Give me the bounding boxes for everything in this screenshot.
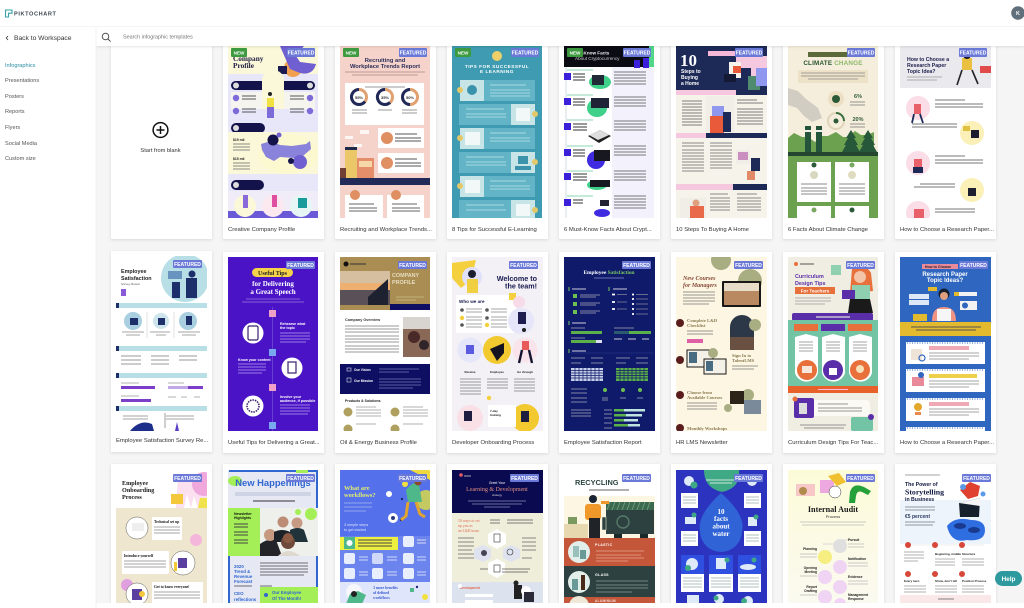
icon: search (102, 33, 111, 42)
thumbnail: Company Overview (345, 318, 380, 322)
featured badge (287, 48, 315, 57)
thumbnail: Pursuit (848, 538, 860, 542)
thumbnail: RECYCLING (575, 478, 619, 487)
card: Recruiting and Workplace Trends (335, 40, 436, 239)
thumbnail: Our Employee (272, 590, 302, 595)
thumbnail: Welcome to (497, 274, 538, 283)
thumbnail: training (490, 413, 501, 417)
thumbnail: Topic Idea? (907, 69, 935, 75)
card: Learning & Development (447, 464, 548, 608)
navigation list: Infographics (5, 63, 36, 69)
featured badge: FEATURED (511, 476, 538, 482)
featured badge: FEATURED (735, 476, 762, 482)
logo: PIKTOCHART (14, 12, 57, 18)
caption: HR LMS Newsletter (676, 440, 728, 446)
featured badge: FEATURED (847, 476, 874, 482)
thumbnail: Our Mission (354, 379, 373, 383)
caption: Creative Company Profile (228, 227, 296, 233)
thumbnail (116, 256, 207, 431)
navigation list: Flyers (5, 125, 20, 131)
thumbnail: Onboarding (122, 487, 155, 494)
caption: Developer Onboarding Process (452, 440, 534, 446)
featured badge: FEATURED (174, 476, 201, 482)
thumbnail: 55% (355, 95, 363, 100)
label: start from blank: Start from blank (140, 148, 181, 154)
thumbnail: Development (460, 586, 481, 590)
thumbnail: Go through (517, 370, 533, 374)
thumbnail: Steps to (681, 69, 701, 75)
thumbnail: of defined (373, 591, 390, 595)
thumbnail: 10 (718, 508, 725, 516)
thumbnail: Show, don't tell (935, 579, 957, 583)
navigation list: Posters (5, 94, 24, 100)
thumbnail: Greet Your (489, 481, 506, 485)
thumbnail (340, 46, 430, 218)
card: Internal Audit Process (783, 464, 884, 608)
thumbnail: Useful Tips (258, 271, 288, 277)
featured badge (959, 48, 987, 57)
thumbnail: Learning & Development (466, 487, 528, 493)
thumbnail: Highlights (234, 516, 251, 520)
thumbnail: New Happenings (235, 477, 311, 488)
thumbnail (676, 46, 767, 218)
thumbnail: -Know Facts (582, 50, 610, 56)
thumbnail: Survey Result (121, 282, 140, 286)
thumbnail (676, 257, 767, 431)
thumbnail: $15 mil (233, 157, 245, 161)
card: Employee Onboarding Process (111, 464, 216, 608)
thumbnail: 3 simple steps (344, 523, 368, 527)
thumbnail: Available Courses (687, 395, 722, 400)
new badge: NEW (458, 50, 469, 56)
featured badge (622, 261, 651, 269)
thumbnail: the team! (505, 282, 537, 290)
thumbnail: audience, if possible (280, 399, 315, 403)
thumbnail: Structure (962, 552, 976, 556)
featured badge (511, 48, 539, 57)
thumbnail: workflows? (344, 492, 376, 499)
thumbnail: Who we are (459, 299, 485, 304)
new badge (455, 48, 471, 57)
thumbnail: 7-day (490, 409, 498, 413)
navigation list: Social Media (5, 141, 38, 147)
featured badge: FEATURED (624, 50, 651, 56)
thumbnail: to get started (344, 528, 366, 532)
thumbnail: Planning (803, 547, 817, 551)
caption: 8 Tips for Successful E-Learning (452, 227, 537, 233)
card: 6 Must-Know Facts About Crypto (559, 40, 660, 239)
thumbnail (340, 257, 430, 431)
thumbnail: Employee (121, 269, 146, 275)
thumbnail: Evidence (848, 575, 863, 579)
thumbnail: Profile (233, 61, 255, 70)
featured badge: FEATURED (512, 50, 539, 56)
thumbnail: 6% (854, 94, 862, 100)
thumbnail: water (712, 530, 730, 538)
caption: Employee Satisfaction Survey Re... (116, 438, 209, 444)
thumbnail (900, 474, 991, 603)
featured badge (398, 261, 427, 269)
featured badge (846, 261, 875, 269)
thumbnail: New Courses (682, 276, 716, 282)
thumbnail: How to Choose a (907, 57, 949, 63)
thumbnail: Curriculum (795, 274, 824, 280)
featured badge: FEATURED (287, 476, 314, 482)
navigation list: Presentations (5, 78, 39, 84)
featured badge (847, 48, 875, 57)
card: Developer Onboarding Process (447, 252, 548, 453)
thumbnail: Technical set up (154, 520, 179, 524)
thumbnail: Employee Satisfaction (583, 270, 635, 276)
thumbnail (564, 257, 655, 431)
featured badge: FEATURED (963, 476, 990, 482)
navigation list: Custom size (5, 156, 36, 162)
card: Employee Satisfaction Report (559, 252, 660, 453)
back link: Back to Workspace (14, 35, 72, 42)
caption: Useful Tips for Delivering a Great... (228, 440, 320, 446)
thumbnail: 20% (852, 117, 864, 123)
featured badge: FEATURED (960, 50, 987, 56)
avatar (1011, 6, 1024, 20)
card: HR LMS Newsletter (671, 250, 772, 453)
thumbnail: Research Paper (922, 272, 968, 278)
thumbnail: the topic (280, 326, 295, 330)
thumbnail: about (712, 522, 730, 530)
thumbnail: a Home (681, 81, 699, 87)
help button: Help (1002, 576, 1016, 583)
thumbnail: Report (806, 585, 818, 589)
featured badge: FEATURED (735, 263, 762, 269)
new badge (567, 48, 583, 57)
thumbnail (564, 46, 654, 218)
thumbnail: Satisfaction (121, 276, 152, 282)
caption: How to Choose a Research Paper... (900, 227, 994, 233)
featured badge (959, 261, 988, 269)
caption: Oil & Energy Business Profile (340, 440, 418, 446)
card: New Happenings (223, 464, 324, 608)
featured badge (735, 48, 763, 57)
featured badge (509, 261, 538, 269)
thumbnail: Process (826, 514, 840, 519)
featured badge: FEATURED (623, 476, 650, 482)
card: Employee Satisfaction Survey (111, 251, 212, 452)
new badge (231, 48, 247, 57)
featured badge (623, 48, 651, 57)
featured badge (173, 260, 202, 268)
card: What are workflows? (335, 464, 436, 608)
thumbnail: for Delivering (252, 280, 294, 288)
thumbnail: reflections (234, 597, 257, 602)
bottom strip (96, 603, 1024, 608)
thumbnail: Receive (465, 370, 476, 374)
thumbnail: Rehearse what (280, 322, 306, 326)
logo (6, 10, 57, 18)
caption: Curriculum Design Tips For Teac... (788, 440, 879, 446)
featured badge (399, 48, 427, 57)
new badge: NEW (570, 50, 581, 56)
card: 10 facts about water (671, 464, 772, 608)
card: 10 Steps To Buying A Home (671, 40, 772, 239)
thumbnail: GLASS (595, 573, 609, 577)
thumbnail: 10 (680, 51, 697, 70)
featured badge: FEATURED (399, 263, 426, 269)
card: Useful Tips for Delivering a Great Speech (223, 252, 324, 453)
thumbnail: E LEARNING (480, 69, 514, 74)
thumbnail: Employee (490, 370, 504, 374)
thumbnail: Beginning, middle (935, 552, 961, 556)
thumbnail: Employee (122, 480, 148, 487)
thumbnail: in Business (905, 497, 934, 503)
featured badge (622, 474, 651, 482)
thumbnail: Topic Ideas? (927, 278, 963, 284)
thumbnail (676, 470, 767, 603)
thumbnail (340, 470, 430, 603)
thumbnail: Opening (804, 566, 817, 570)
thumbnail: Recruiting and (365, 58, 406, 64)
thumbnail: 50% (406, 95, 414, 100)
navigation list (5, 63, 39, 162)
thumbnail: Monthly Workshops (687, 426, 727, 431)
featured badge: FEATURED (288, 50, 315, 56)
featured badge (286, 261, 315, 269)
icon: plus in circle (153, 123, 168, 137)
card: Creative Company Profile (223, 40, 324, 239)
card: Oil & Energy Business Profile (335, 252, 436, 453)
thumbnail: Buying (681, 75, 698, 81)
featured badge (734, 261, 763, 269)
thumbnail: 10 ways to set (458, 519, 481, 523)
thumbnail: up you as (458, 524, 473, 528)
thumbnail: Choose from (687, 390, 712, 395)
new badge (343, 48, 359, 57)
card: The Power of Storytelling in Business (895, 464, 996, 608)
navigation list: Reports (5, 109, 25, 115)
thumbnail (116, 472, 207, 603)
thumbnail: Design Tips (795, 281, 825, 287)
thumbnail: CEO (234, 591, 244, 596)
thumbnail: Checklist (687, 323, 706, 328)
card: How to Choose a Research Paper (row 2) (895, 252, 996, 453)
thumbnail: for Managers (683, 283, 718, 289)
thumbnail: Research Paper (907, 63, 946, 69)
top header (0, 0, 1024, 27)
card: 8 Tips for Successful E-Learning (447, 40, 548, 239)
thumbnail: Of The Month! (272, 596, 302, 601)
thumbnail (452, 46, 542, 218)
thumbnail: Forecast (234, 579, 253, 584)
caption: Employee Satisfaction Report (564, 440, 642, 446)
thumbnail: workflows (373, 596, 390, 600)
search bar (96, 27, 1024, 46)
caption: Recruiting and Workplace Trends... (340, 227, 432, 233)
thumbnail: Sign In to (732, 353, 752, 358)
caption: 6 Must-Know Facts About Crypt... (564, 227, 652, 233)
thumbnail: About Cryptocurrency (575, 56, 620, 61)
thumbnail: PLASTIC (595, 543, 613, 547)
caption: 10 Steps To Buying A Home (676, 227, 750, 233)
thumbnail (228, 257, 318, 431)
featured badge: FEATURED (847, 263, 874, 269)
card: How to Choose a Research Paper (row 1) (895, 40, 996, 239)
thumbnail (900, 257, 991, 431)
thumbnail: Our Vision (354, 368, 371, 372)
thumbnail: 2020 (234, 564, 244, 569)
thumbnail: Revenue (234, 574, 253, 579)
thumbnail: ALUMINIUM (595, 599, 616, 603)
thumbnail: Introduce yourself (124, 554, 154, 558)
thumbnail: PROFILE (392, 280, 416, 286)
thumbnail: Process (122, 494, 142, 501)
thumbnail (900, 46, 991, 218)
thumbnail: strategy (492, 493, 503, 497)
thumbnail: Trend & (234, 569, 251, 574)
thumbnail: $19 mil (233, 138, 245, 142)
new badge: NEW (346, 50, 357, 56)
card: 6 Facts About Climate Change (783, 40, 884, 239)
thumbnail: €5 percent (905, 514, 930, 520)
search placeholder: Search infographic templates (123, 34, 193, 40)
thumbnail: Company (233, 54, 264, 63)
thumbnail: CLIMATE CHANGE (803, 60, 863, 67)
featured badge: FEATURED (960, 263, 987, 269)
thumbnail: facts (714, 515, 728, 523)
thumbnail: Know your content (238, 358, 271, 362)
thumbnail: Management (848, 593, 869, 597)
thumbnail: Workplace Trends Report (350, 64, 420, 70)
thumbnail: Involve your (280, 395, 302, 399)
thumbnail: Newsletter (234, 512, 252, 516)
thumbnail: For Teachers (801, 288, 830, 294)
featured badge: FEATURED (399, 476, 426, 482)
new badge: NEW (234, 50, 245, 56)
thumbnail (788, 470, 878, 603)
thumbnail: The Power of (905, 482, 938, 488)
thumbnail: Complete L&D (687, 318, 718, 323)
avatar: K (1016, 11, 1020, 17)
thumbnail: Position Process (962, 579, 987, 583)
thumbnail (564, 474, 655, 603)
featured badge: FEATURED (623, 263, 650, 269)
thumbnail: Get to know everyone! (154, 585, 190, 589)
thumbnail: Every hero (904, 579, 920, 583)
thumbnail (788, 257, 878, 431)
thumbnail: Response (848, 597, 864, 601)
help button (995, 571, 1022, 586)
thumbnail: an L&D team (458, 529, 479, 533)
featured badge: FEATURED (510, 263, 537, 269)
thumbnail: TalentLMS (732, 358, 755, 363)
card: Curriculum Design Tips For Teachers (783, 252, 884, 453)
sidebar (0, 27, 96, 608)
thumbnail: COMPANY (392, 273, 420, 279)
thumbnail (228, 46, 318, 218)
card: Recycling (559, 464, 660, 608)
featured badge: FEATURED (400, 50, 427, 56)
featured badge: FEATURED (848, 50, 875, 56)
thumbnail: 35% (381, 95, 389, 100)
thumbnail: Notification (848, 557, 866, 561)
thumbnail: How to Choose (925, 265, 951, 269)
featured badge: FEATURED (174, 262, 201, 268)
thumbnail (452, 257, 543, 431)
card: start from blank (111, 40, 212, 239)
featured badge: FEATURED (736, 50, 763, 56)
thumbnail: What are (344, 485, 370, 492)
thumbnail: a Great Speech (250, 288, 296, 296)
thumbnail: Drafting (804, 589, 817, 593)
thumbnail: TIPS FOR SUCCESSFUL (465, 64, 529, 69)
featured badge: FEATURED (287, 263, 314, 269)
thumbnail (788, 46, 878, 218)
thumbnail: Products & Solutions (345, 399, 381, 403)
thumbnail: 3 more benefits (373, 586, 398, 590)
thumbnail (228, 470, 318, 603)
thumbnail: Meeting (805, 570, 817, 574)
caption: How to Choose a Research Paper... (900, 440, 994, 446)
thumbnail: Storytelling (905, 488, 944, 496)
thumbnail: Internal Audit (808, 505, 858, 514)
thumbnail (452, 470, 543, 603)
caption: 6 Facts About Climate Change (788, 227, 869, 233)
